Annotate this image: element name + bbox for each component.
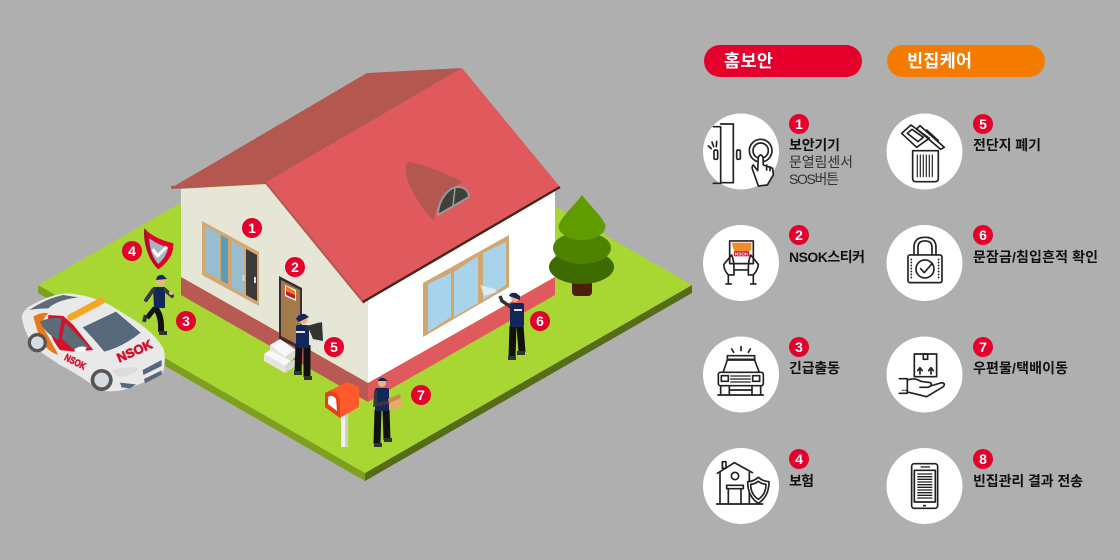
heading pill: home security bbox=[704, 45, 862, 77]
scene marker 3: 3 bbox=[182, 313, 190, 329]
number badge 6 bbox=[973, 225, 993, 245]
scene marker 5: 5 bbox=[330, 339, 338, 355]
item 6: door lock and intrusion check bbox=[886, 225, 1098, 301]
scene marker 4: 4 bbox=[128, 243, 136, 259]
scene marker 2 bbox=[285, 257, 305, 277]
heading pill: home security: 홈보안 bbox=[724, 51, 773, 71]
scene marker 7 bbox=[411, 385, 431, 405]
house foundation bbox=[181, 277, 555, 402]
item 5: flyer disposal bbox=[886, 114, 1041, 190]
house bbox=[171, 68, 560, 402]
number badge 8 bbox=[973, 449, 993, 469]
scene marker 7: 7 bbox=[417, 387, 425, 403]
label: emergency dispatch: 긴급출동 bbox=[789, 360, 840, 376]
icon: hands holding sticker: NSOK bbox=[735, 252, 749, 257]
label: door sensor: 문열림센서 bbox=[789, 154, 853, 170]
entrance steps bbox=[264, 339, 296, 373]
icon: house with shield bbox=[717, 462, 769, 504]
label: SOS button: SOS버튼 bbox=[789, 171, 839, 187]
label: security devices: 보안기기 bbox=[789, 137, 840, 153]
guard removing flyer at door bbox=[294, 314, 323, 380]
number badge 1: 1 bbox=[795, 116, 803, 132]
security patrol car: NSOK bbox=[62, 353, 88, 373]
insurance shield bbox=[144, 228, 173, 269]
scene marker 6: 6 bbox=[536, 313, 544, 329]
front door with sticker bbox=[279, 276, 302, 350]
guard inspecting window with flashlight bbox=[480, 285, 525, 360]
number badge 3: 3 bbox=[795, 339, 803, 355]
left sliding window bbox=[202, 221, 259, 306]
number badge 8: 8 bbox=[979, 451, 987, 467]
red mailbox bbox=[325, 382, 359, 447]
label: flyer disposal: 전단지 폐기 bbox=[973, 137, 1041, 153]
tree bbox=[549, 195, 614, 296]
guard delivering parcel bbox=[374, 378, 402, 447]
icon: padlock with check bbox=[908, 237, 942, 283]
icon: tablet with report bbox=[912, 464, 938, 508]
isometric lawn ground bbox=[38, 97, 692, 481]
scene marker 1: 1 bbox=[248, 220, 256, 236]
item 1: security devices bbox=[703, 114, 853, 190]
roof dormer window bbox=[405, 162, 469, 221]
security patrol car bbox=[22, 293, 165, 391]
label: mail and parcel moving: 우편물/택배이동 bbox=[973, 360, 1068, 376]
label: door lock and intrusion check: 문잠금/침입흔적 확인 bbox=[973, 249, 1098, 265]
item 2: NSOK sticker bbox=[703, 225, 865, 301]
icon: hands holding sticker bbox=[724, 241, 758, 284]
icon: flyers into trash can bbox=[902, 125, 944, 182]
label: NSOK sticker: NSOK스티커 bbox=[789, 249, 865, 265]
house left wall bbox=[181, 184, 368, 383]
label: report results: 빈집관리 결과 전송 bbox=[973, 473, 1083, 489]
scene marker 1 bbox=[242, 218, 262, 238]
item 4: insurance bbox=[703, 448, 814, 524]
scene marker 4 bbox=[122, 241, 142, 261]
scene marker 6 bbox=[530, 311, 550, 331]
right picture window bbox=[423, 235, 509, 337]
running guard bbox=[142, 275, 173, 335]
number badge 2: 2 bbox=[795, 227, 803, 243]
icon: patrol car front bbox=[718, 347, 763, 395]
icon: hand holding parcel bbox=[899, 354, 944, 397]
item 3: emergency dispatch bbox=[703, 336, 840, 412]
number badge 7 bbox=[973, 337, 993, 357]
item 7: mail and parcel moving bbox=[886, 336, 1068, 412]
house right wall bbox=[368, 190, 555, 383]
label: insurance: 보험 bbox=[789, 473, 814, 489]
number badge 6: 6 bbox=[979, 227, 987, 243]
icon: door sensor and SOS button bbox=[708, 124, 773, 186]
scene marker 3 bbox=[176, 311, 196, 331]
number badge 5: 5 bbox=[979, 116, 987, 132]
roof bbox=[171, 68, 560, 303]
number badge 4: 4 bbox=[795, 451, 803, 467]
number badge 2 bbox=[789, 225, 809, 245]
heading pill: vacant home care: 빈집케어 bbox=[907, 51, 972, 71]
number badge 1 bbox=[789, 114, 809, 134]
number badge 5 bbox=[973, 114, 993, 134]
scene marker 2: 2 bbox=[291, 259, 299, 275]
heading pill: vacant home care bbox=[887, 45, 1045, 77]
number badge 7: 7 bbox=[979, 339, 987, 355]
scene marker 5 bbox=[324, 337, 344, 357]
item 8: report results bbox=[886, 448, 1083, 524]
security patrol car: NSOK bbox=[115, 337, 155, 365]
